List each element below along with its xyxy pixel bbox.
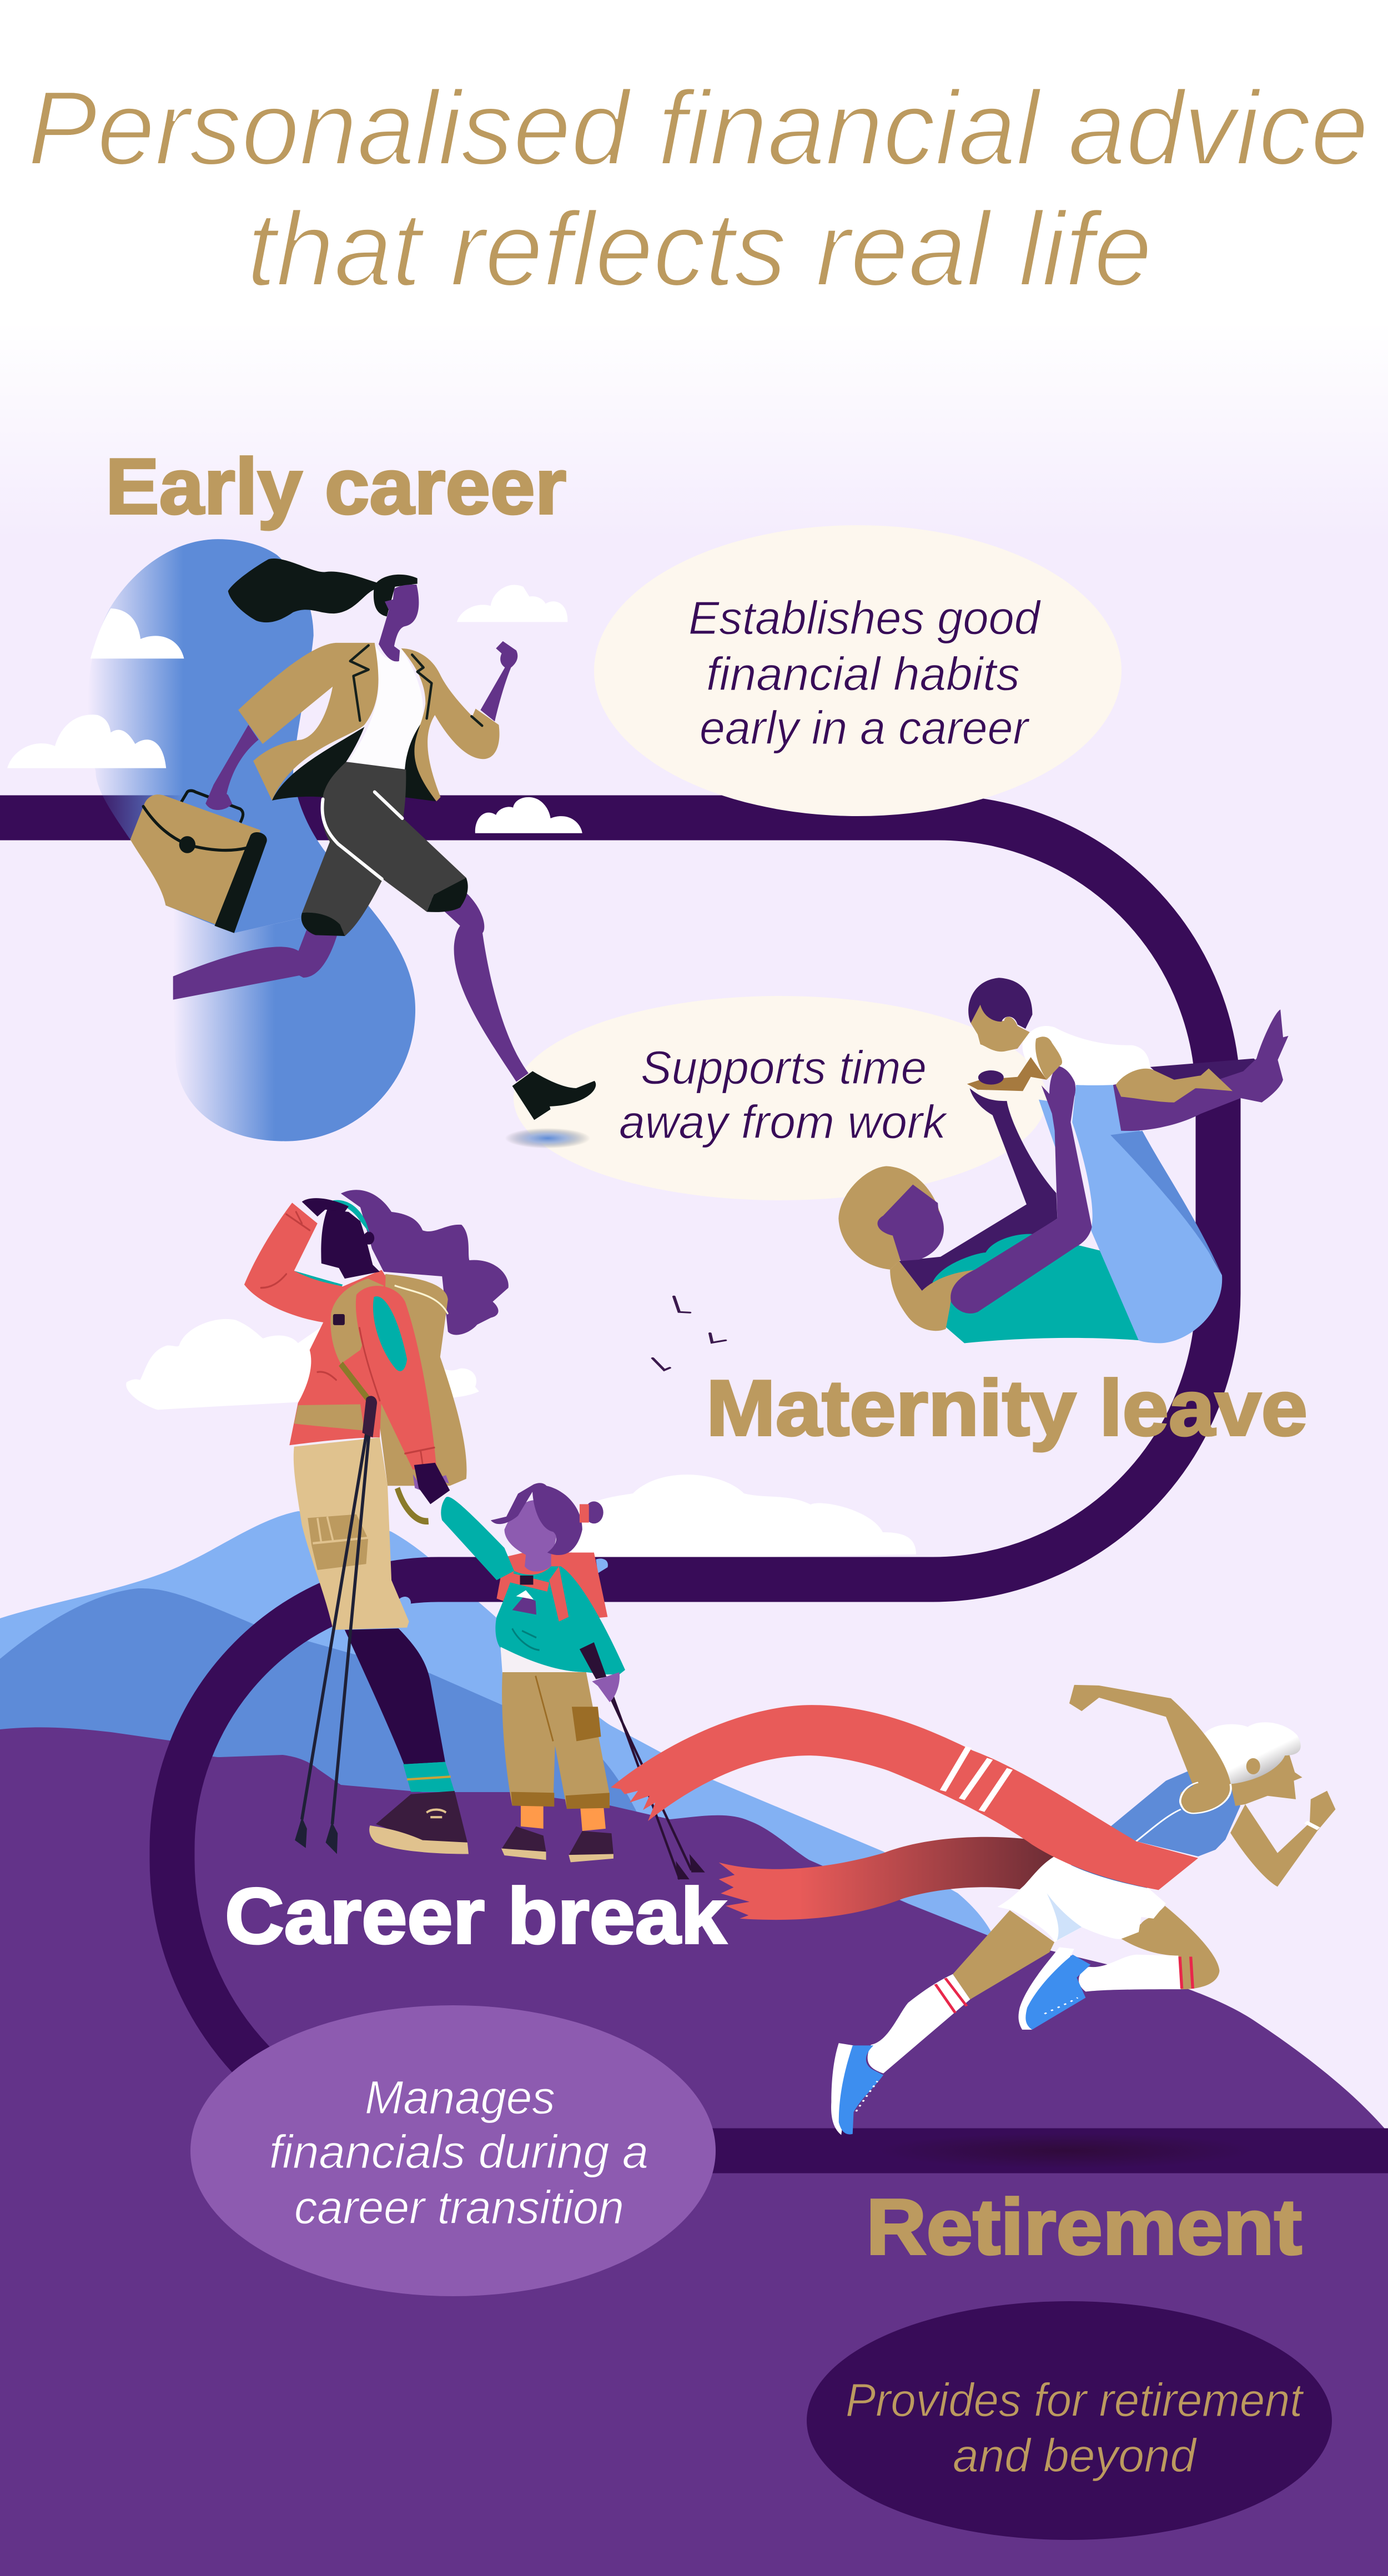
wristband — [1306, 1822, 1319, 1829]
hip belt — [294, 1404, 364, 1431]
speech ellipse: early career — [594, 525, 1122, 816]
speech ellipse: retirement — [807, 2301, 1332, 2540]
jacket — [238, 643, 500, 801]
shirt and lining — [272, 644, 436, 801]
baby legs — [1116, 1068, 1233, 1103]
hiker backpack — [360, 1274, 466, 1486]
child jumper — [441, 1497, 625, 1674]
child trousers — [502, 1672, 610, 1831]
back leg — [1122, 1906, 1219, 1989]
front leg — [953, 1910, 1054, 1999]
baby hand — [978, 1070, 1004, 1085]
speech ellipse: career break: Manages — [365, 2071, 555, 2124]
mother top — [933, 1234, 1140, 1343]
back leg — [173, 914, 340, 1000]
baby shirt — [1023, 1026, 1150, 1085]
path shadow under retirement runner — [877, 2133, 1255, 2169]
backpack lower strap — [398, 1488, 429, 1521]
mother hair — [838, 1166, 943, 1270]
hiker trousers — [294, 1437, 409, 1630]
child backpack — [496, 1552, 607, 1622]
heading: retirement: Retirement — [866, 2183, 1302, 2271]
clouds — [7, 585, 567, 768]
back arm — [205, 725, 259, 810]
winding journey path — [0, 818, 1388, 2151]
hill: light blue — [0, 1511, 992, 2054]
illustration: early career businesswoman — [7, 539, 596, 1149]
ribbon front — [611, 1705, 1198, 1890]
running shoes — [831, 1947, 1090, 2135]
hill: purple foreground — [0, 1727, 1388, 2576]
briefcase — [130, 784, 267, 933]
title — [28, 69, 1369, 308]
shorts — [301, 762, 468, 936]
hiker legs — [345, 1628, 455, 1792]
heading: early career: Early career — [105, 442, 566, 531]
baby arm — [967, 1037, 1062, 1091]
illustration: hiker and child — [244, 1190, 705, 1879]
child head — [491, 1483, 604, 1572]
speech ellipse: maternity leave — [514, 996, 1047, 1200]
speech ellipse: maternity leave: Supports time — [641, 1042, 927, 1094]
heading: maternity leave: Maternity leave — [706, 1364, 1307, 1452]
illustration: mother lifting baby — [653, 978, 1289, 1370]
clouds behind hiker — [126, 1319, 916, 1560]
shorts — [997, 1856, 1166, 1942]
hill: mid blue — [0, 1588, 638, 1943]
title: Personalised financial advice — [28, 69, 1369, 187]
face — [1230, 1740, 1302, 1806]
speech ellipse: early career: early in a career — [700, 702, 1030, 754]
ribbon back — [719, 1837, 1057, 1920]
socks — [868, 1955, 1193, 2074]
raised fist — [480, 641, 517, 721]
speech ellipse: retirement: Provides for retirement — [846, 2374, 1305, 2426]
mother legs — [1039, 1085, 1222, 1343]
speech ellipse: retirement: and beyond — [953, 2429, 1197, 2482]
mother neck — [890, 1261, 980, 1331]
hiker hair — [341, 1190, 509, 1335]
hiker poles — [295, 1396, 377, 1854]
speech ellipse: career break: career transition — [294, 2181, 624, 2233]
hair — [1203, 1722, 1301, 1784]
hiker jumper — [244, 1203, 386, 1445]
birds — [653, 1296, 726, 1370]
ear — [1246, 1758, 1260, 1774]
backpack side strap — [341, 1364, 370, 1401]
shoe and shadow — [505, 1071, 596, 1149]
hair — [228, 559, 418, 622]
raised arm — [1069, 1685, 1231, 1842]
singlet — [1109, 1769, 1240, 1856]
blue blob — [88, 539, 415, 1141]
backpack shoulder strap — [330, 1279, 384, 1364]
child shoes — [501, 1827, 613, 1862]
speech ellipse: maternity leave: away from work — [619, 1096, 948, 1148]
hiker sleeve — [333, 1286, 448, 1470]
baby leggings — [1113, 1009, 1289, 1131]
baby head — [968, 978, 1032, 1051]
snow drifts — [398, 1558, 608, 1636]
title: that reflects real life — [247, 190, 1152, 308]
child shirt hem — [501, 1647, 586, 1674]
mother face — [877, 1185, 944, 1261]
hiker boot — [369, 1791, 469, 1854]
speech ellipse: career break: financials during a — [269, 2126, 648, 2178]
front leg — [431, 880, 529, 1081]
mother front arm — [951, 1064, 1092, 1314]
face — [379, 585, 419, 661]
illustration: retirement runner and finish ribbon — [611, 1685, 1335, 2135]
speech ellipse: early career: financial habits — [706, 648, 1020, 700]
cloud on path — [475, 797, 582, 833]
speech ellipse: career break — [190, 2005, 716, 2296]
child poles and glove — [580, 1642, 705, 1879]
speech ellipse: early career: Establishes good — [688, 592, 1041, 644]
front arm — [1230, 1791, 1335, 1886]
mother back arm — [899, 1088, 1057, 1291]
hiker glove — [413, 1463, 450, 1504]
hiker head — [302, 1198, 380, 1279]
heading: career break: Career break — [225, 1872, 727, 1960]
